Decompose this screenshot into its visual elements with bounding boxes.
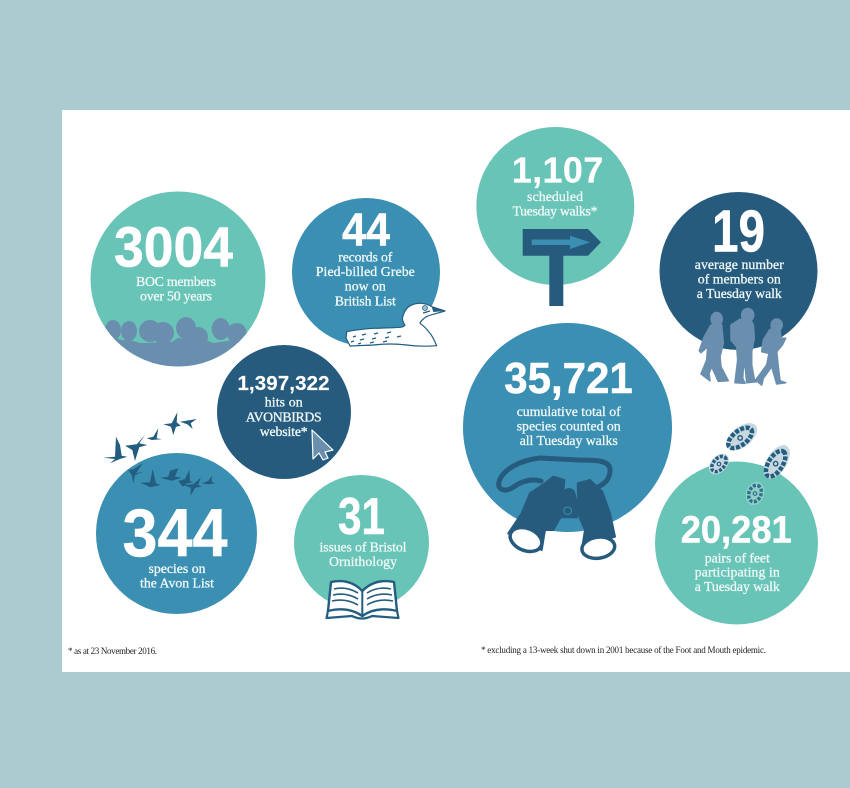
- label: average number of members: of members on: [698, 271, 781, 286]
- label: pairs of feet: participating in: [695, 565, 780, 580]
- number: 1,397,322: 1,397,322: [238, 372, 330, 395]
- label: pairs of feet: pairs of feet: [705, 550, 770, 565]
- label: Pied-billed Grebe: now on: [345, 279, 386, 294]
- footnote: left: * as at 23 November 2016.: [68, 646, 157, 656]
- icon: flock of geese: [103, 412, 215, 496]
- label: species on the Avon List: [140, 561, 214, 590]
- label: average number of members: [695, 257, 784, 301]
- label: Pied-billed Grebe: Pied-billed Grebe: [316, 264, 415, 279]
- label: scheduled Tuesday walks: [512, 189, 598, 219]
- number: 3004: 3004: [114, 216, 233, 280]
- label: hits on AVONBIRDS: [246, 395, 322, 439]
- icon: grebe: [346, 303, 445, 346]
- number: 344: 344: [122, 495, 228, 571]
- label: hits on AVONBIRDS: AVONBIRDS: [246, 410, 322, 425]
- label: species on the Avon List: the Avon List: [140, 575, 214, 590]
- label: issues of Bristol Ornithology: issues of Bristol: [320, 540, 407, 555]
- label: Pied-billed Grebe: [316, 250, 415, 308]
- stat circle: 20,281 pairs of feet: [655, 462, 818, 624]
- label: issues of Bristol Ornithology: Ornithology: [329, 554, 397, 569]
- number: 35,721: 35,721: [504, 354, 633, 403]
- label: average number of members: a Tuesday walk: [697, 286, 782, 301]
- label: Pied-billed Grebe: British List: [335, 293, 396, 308]
- stat circle: 31 issues: [294, 475, 429, 618]
- label: cumulative total: all Tuesday walks: [520, 433, 618, 448]
- label: hits on AVONBIRDS: website*: [260, 424, 308, 439]
- icon: open book: [326, 581, 398, 618]
- label: species on the Avon List: species on: [148, 561, 206, 576]
- icon: signpost: [523, 229, 601, 306]
- label: cumulative total: [517, 404, 621, 448]
- icon: boot prints: [705, 418, 795, 508]
- stat circle: 44 records: [292, 198, 445, 346]
- footnote: right: * excluding a 13-week shut down in 2001 because of the Foot and Mouth epidemic.: [481, 645, 766, 655]
- icon: cursor: [312, 430, 333, 460]
- label: BOC members: [136, 274, 216, 304]
- label: pairs of feet: [695, 550, 780, 594]
- stat circle: 19 members: [660, 192, 818, 385]
- label: average number of members: average number: [695, 257, 784, 272]
- label: issues of Bristol Ornithology: [320, 540, 407, 569]
- white panel: [62, 110, 850, 672]
- label: BOC members: over 50 years: [140, 289, 212, 304]
- stat circle: 1,397,322 hits: [217, 345, 351, 479]
- label: hits on AVONBIRDS: hits on: [265, 395, 303, 410]
- number: 20,281: 20,281: [681, 510, 792, 552]
- number: 44: 44: [342, 204, 390, 256]
- label: scheduled Tuesday walks: Tuesday walks*: [512, 204, 598, 219]
- number: 19: 19: [712, 199, 765, 265]
- icon: crowd silhouette: [105, 317, 247, 366]
- label: pairs of feet: a Tuesday walk: [695, 579, 780, 594]
- stat circle: 3004 BOC members: [90, 192, 266, 366]
- label: cumulative total: cumulative total of: [517, 404, 621, 419]
- icon: three walkers: [699, 308, 786, 385]
- label: BOC members: BOC members: [136, 274, 216, 289]
- label: Pied-billed Grebe: records of: [338, 250, 393, 265]
- stat circle: 344 species: [96, 453, 257, 614]
- stat circle: 35,721 species counted: [463, 323, 672, 560]
- number: 1,107: 1,107: [512, 149, 603, 190]
- stat circle: 1,107 walks: [476, 127, 634, 306]
- label: scheduled Tuesday walks: scheduled: [527, 189, 583, 204]
- number: 31: 31: [338, 488, 385, 546]
- label: cumulative total: species counted on: [517, 419, 621, 434]
- icon: binoculars: [499, 458, 616, 560]
